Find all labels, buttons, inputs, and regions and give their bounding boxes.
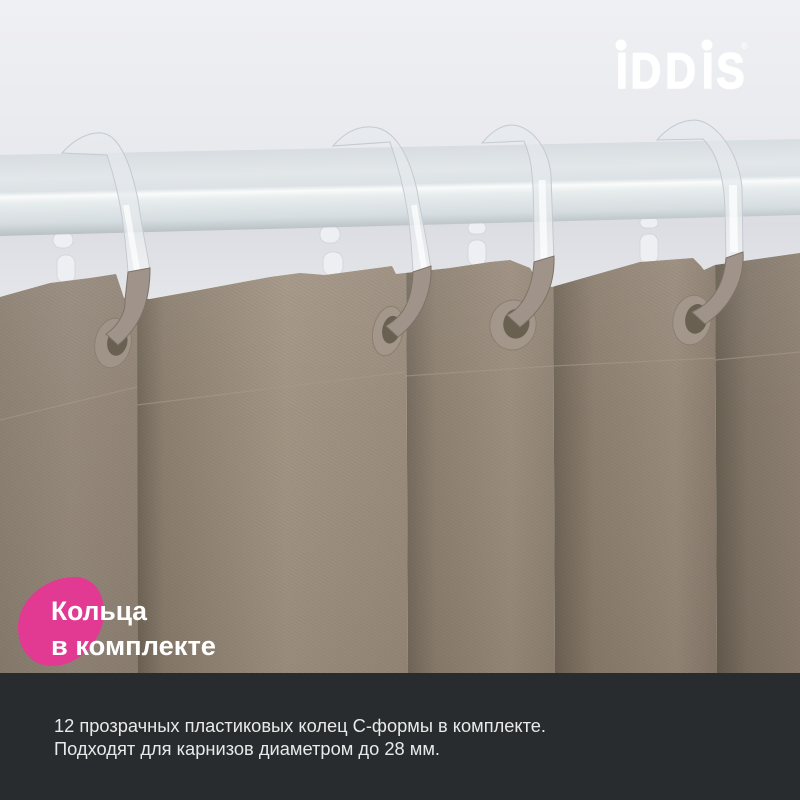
ring 4 — [657, 120, 743, 324]
ring 2 — [333, 127, 431, 337]
hem stitch line — [0, 352, 800, 420]
heading — [51, 596, 216, 661]
pink blob — [18, 577, 104, 666]
description text: Подходят для карнизов диаметром до 28 мм. — [54, 739, 440, 759]
ring 3 — [482, 125, 554, 327]
logo: IDDIS: ® — [741, 41, 748, 51]
background wall — [0, 0, 800, 300]
droplets behind the rod — [53, 217, 658, 283]
eyelets — [90, 292, 716, 371]
description text: 12 прозрачных пластиковых колец С-формы в комплекте. — [54, 716, 546, 736]
curtain — [0, 240, 800, 673]
bottom dark panel — [0, 673, 800, 800]
description text — [54, 716, 546, 759]
heading: в комплекте — [51, 631, 216, 661]
curtain rod — [0, 139, 800, 236]
logo: IDDIS: IDDIS — [616, 43, 745, 99]
ring 1 — [62, 133, 150, 345]
heading: Кольца — [51, 596, 148, 626]
